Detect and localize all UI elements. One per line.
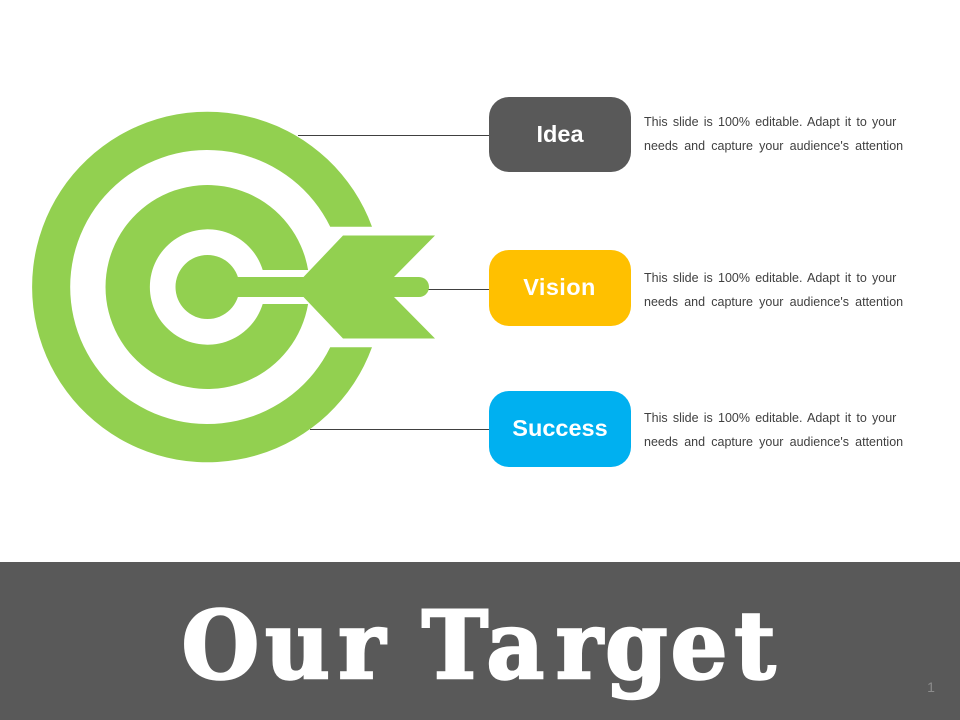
box: vision <box>489 250 631 326</box>
text block: vision <box>644 271 903 309</box>
title banner <box>0 562 960 720</box>
outer ring <box>32 112 372 462</box>
box: idea <box>489 97 631 172</box>
text block: vision: needs and capture your audience's attention <box>644 295 903 309</box>
middle ring <box>106 185 308 389</box>
text block: idea <box>644 115 903 153</box>
connector: vision <box>428 288 490 290</box>
text block: success: needs and capture your audience's attention <box>644 435 903 449</box>
box: success <box>489 391 631 467</box>
text block: success: This slide is 100% editable. Adapt it to your <box>644 411 896 425</box>
text block: idea: This slide is 100% editable. Adapt it to your <box>644 115 896 129</box>
box: idea: Idea <box>536 121 584 147</box>
arrow head <box>294 236 435 338</box>
bullseye <box>176 255 240 319</box>
title: Our Target <box>181 590 776 701</box>
box: vision: Vision <box>523 274 596 300</box>
connector: idea <box>298 134 490 136</box>
page number: 1 <box>927 679 935 695</box>
icon: target with arrow <box>32 112 435 462</box>
connector: success <box>310 428 490 430</box>
text block: vision: This slide is 100% editable. Adapt it to your <box>644 271 896 285</box>
text block: success <box>644 411 903 449</box>
arrow shaft <box>225 277 429 297</box>
box: success: Success <box>512 415 608 441</box>
text block: idea: needs and capture your audience's attention <box>644 139 903 153</box>
